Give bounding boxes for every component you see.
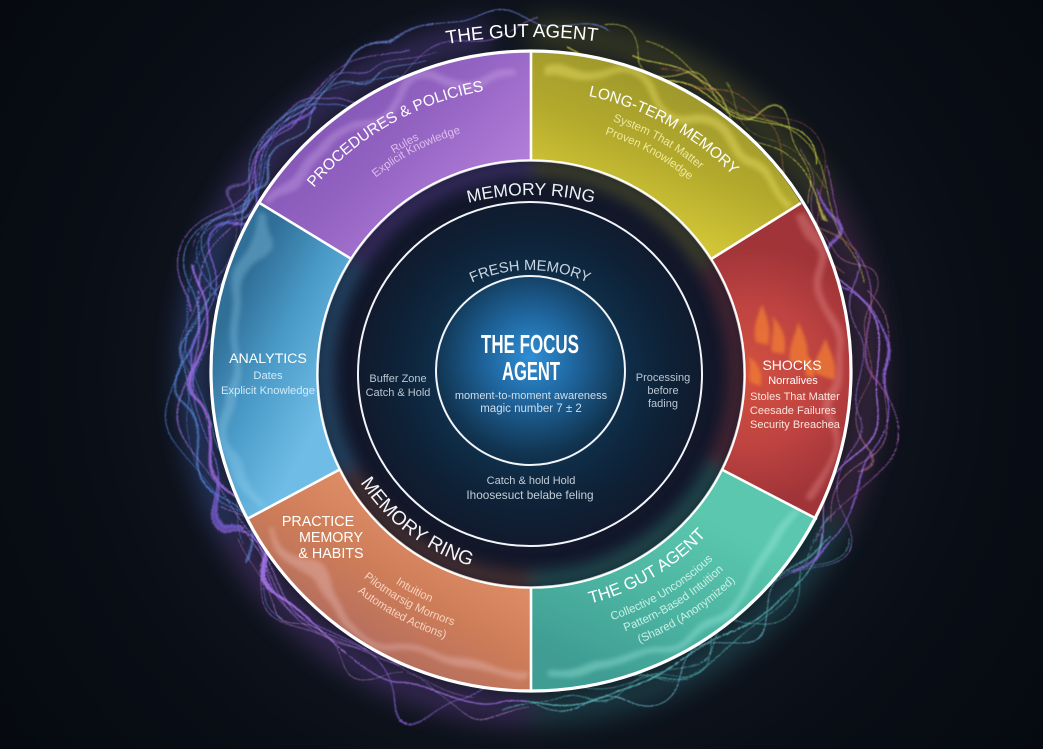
text block: shocks: Security Breachea	[750, 419, 841, 431]
text block: catch and hold	[466, 475, 594, 502]
text block: the gut agent segment: Pattern-Based Intuition	[623, 566, 724, 631]
text block: shocks: Ceesade Failures	[750, 405, 837, 417]
text block: processing before fading: before	[647, 385, 679, 397]
panel: shocks	[531, 203, 851, 519]
heading: memory ring bottom: MEMORY RING	[361, 476, 472, 564]
text block: practice memory and habits: Pilotmarsig Mornors	[364, 572, 454, 625]
text block: focus agent: THE FOCUS	[481, 329, 579, 359]
text block: buffer zone: Buffer Zone	[369, 373, 427, 385]
memory wheel	[210, 51, 851, 691]
text block: shocks: SHOCKS	[762, 357, 822, 373]
text block: focus agent: magic number 7 ± 2	[480, 403, 582, 415]
title: the gut agent: THE GUT AGENT	[445, 24, 598, 44]
outer rim	[211, 51, 851, 691]
text block: practice memory and habits: PRACTICE	[282, 514, 354, 530]
text block: procedures and policies: Rules	[390, 134, 418, 153]
text block: analytics: Explicit Knowledge	[221, 385, 315, 397]
text block: focus agent: moment-to-moment awareness	[455, 390, 608, 402]
text block: practice memory and habits: & HABITS	[298, 546, 364, 562]
panel: procedures and policies	[258, 51, 531, 371]
text block: shocks: Stoles That Matter	[750, 391, 840, 403]
text block: analytics	[221, 351, 315, 397]
text block: focus agent	[455, 329, 608, 415]
icon: flames	[748, 304, 835, 386]
text block: the gut agent segment: Collective Unconscious	[611, 556, 712, 620]
edge wisps inside the segments	[225, 65, 837, 677]
text block: processing before fading	[636, 372, 690, 410]
text block: procedures and policies: PROCEDURES & POLICIES	[306, 81, 483, 187]
heading: memory ring top: MEMORY RING	[467, 183, 594, 202]
text block: analytics: ANALYTICS	[229, 351, 307, 367]
text block: catch and hold: Catch & hold Hold	[487, 475, 575, 487]
memory ring	[318, 160, 744, 588]
text block: practice memory and habits: Intuition	[396, 577, 432, 602]
panel: practice memory and habits	[247, 371, 531, 691]
panel: long-term memory	[531, 51, 801, 371]
energy wisps around the wheel	[179, 19, 883, 723]
text block: practice memory and habits: MEMORY	[299, 530, 364, 546]
text block: shocks: Norralives	[768, 375, 818, 387]
heading: fresh memory: FRESH MEMORY	[469, 260, 592, 282]
text block: long-term memory: LONG-TERM MEMORY	[590, 86, 740, 172]
segment dividers	[247, 51, 817, 691]
text block: catch and hold: Ihoosesuct belabe feling	[466, 488, 594, 502]
ring colour tint	[325, 168, 737, 580]
text block: long-term memory: Proven Knowledge	[606, 127, 692, 179]
text block: practice memory and habits	[282, 514, 454, 640]
text block: processing before fading: fading	[648, 398, 678, 410]
panel: analytics	[210, 202, 531, 519]
text block: long-term memory: System That Matter	[614, 114, 704, 168]
text block: focus agent: AGENT	[502, 356, 560, 386]
fresh memory circle	[358, 202, 702, 546]
text block: buffer zone	[366, 373, 430, 399]
text block: the gut agent segment: THE GUT AGENT	[588, 527, 704, 602]
text block: analytics: Dates	[253, 370, 283, 382]
text block: the gut agent segment	[588, 527, 736, 644]
text block: procedures and policies: Explicit Knowledge	[372, 128, 460, 177]
panel: the gut agent	[531, 371, 817, 691]
text block: buffer zone: Catch & Hold	[366, 387, 430, 399]
text block: shocks	[750, 357, 841, 431]
text block: the gut agent segment: (Shared (Anonymized)	[638, 576, 736, 644]
text block: processing before fading: Processing	[636, 372, 690, 384]
text block: practice memory and habits: Automated Actions)	[358, 588, 446, 640]
focus agent core	[436, 276, 625, 465]
